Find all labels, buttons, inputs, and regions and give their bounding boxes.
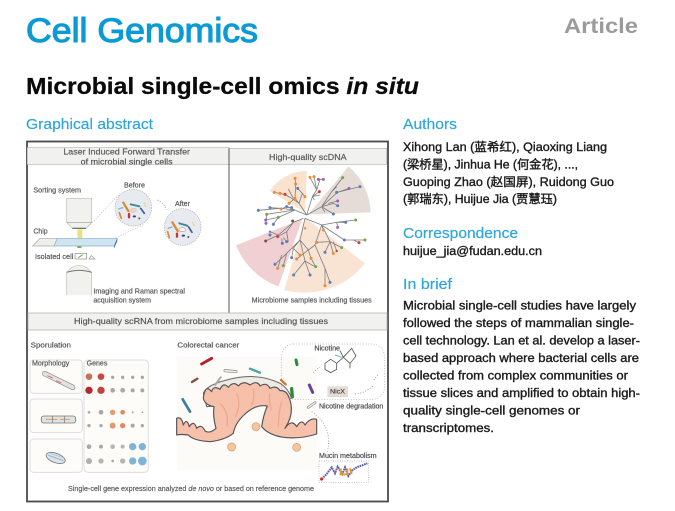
- label: sorting system: Sorting system: [33, 185, 81, 194]
- label: imaging system: acquisition system: [93, 295, 151, 304]
- panel: sporulation: [30, 341, 148, 472]
- illustration: mucus layer: [203, 377, 292, 407]
- text block: authors: Xihong Lan (蓝希红), Qiaoxing Liang: [403, 139, 607, 154]
- icon: red bacterium: [202, 358, 212, 364]
- card: morphology 2: [30, 399, 82, 433]
- chart: blue leaf nodes: [257, 185, 361, 284]
- heading: graphical abstract: Graphical abstract: [26, 117, 153, 133]
- caption: single-cell gene expression: Single-cell gene expression analyzed de novo or based on reference genome: [68, 484, 314, 493]
- text block: authors: (梁桥星), Jinhua He (何金花), ...,: [403, 156, 578, 172]
- card: morphology 1: Morphology: [32, 361, 70, 368]
- icon: lower objective: [67, 265, 92, 295]
- panel: high-quality scDNA: [229, 148, 387, 313]
- arrow: before to after: [157, 200, 167, 210]
- text block: in brief summary: collected from complex communities or: [403, 368, 628, 382]
- icon: cells below tissue: [228, 423, 301, 451]
- icon: bacteria group: [183, 360, 315, 412]
- chart: red leaf nodes: [276, 190, 360, 252]
- label: sporulation: Sporulation: [31, 341, 71, 350]
- card: morphology 3: [30, 439, 82, 472]
- panel: colorectal cancer: [177, 340, 384, 482]
- text block: in brief summary: Microbial single-cell studies have largely: [403, 298, 637, 312]
- chart: green leaf nodes: [265, 176, 366, 268]
- heading: scDNA: High-quality scDNA: [269, 152, 347, 162]
- label: isolated cell: Isolated cell: [35, 252, 74, 261]
- text block: in brief summary: [403, 298, 640, 435]
- text block: authors: [403, 139, 614, 206]
- text block: authors: (郭瑞东), Huijue Jia (贾慧珏): [403, 191, 557, 206]
- illustration: tissue folds: [220, 388, 282, 427]
- callout: nicotine degradation: Nicotine: [314, 346, 340, 353]
- text block: in brief summary: transcriptomes.: [403, 421, 494, 435]
- text block: in brief summary: followed the steps of mammalian single-: [403, 316, 634, 330]
- text block: authors: Guoping Zhao (赵国屏), Ruidong Guo: [403, 175, 614, 189]
- text block: in brief summary: tissue slices and amplified to obtain high-: [403, 386, 640, 400]
- icon: upper objective: [67, 198, 92, 228]
- text block: email: huijue_jia@fudan.edu.cn: [403, 244, 542, 258]
- callout: nicotine degradation: NicX: [330, 389, 346, 396]
- label: after: After: [175, 201, 191, 208]
- icon: after sample circle: [164, 209, 201, 245]
- article type label: Article: [564, 14, 638, 38]
- panel: laser induced forward transfer: [27, 146, 229, 304]
- heading: correspondence: Correspondence: [403, 226, 518, 242]
- band: high-quality scRNA heading: High-quality scRNA from microbiome samples including tissues: [74, 316, 329, 326]
- title: Microbial single-cell omics in situ: [26, 73, 419, 99]
- illustration: colon tissue: [177, 383, 317, 442]
- heading: authors: Authors: [403, 117, 457, 133]
- heading: in brief: In brief: [403, 277, 453, 293]
- chart: purple and brown leaf nodes: [264, 178, 350, 242]
- label: nicotine degradation: Nicotine degradation: [319, 401, 383, 410]
- chart: gene dot matrix: Genes: [87, 361, 108, 368]
- label: imaging system: [93, 286, 185, 304]
- label: colorectal cancer: Colorectal cancer: [177, 340, 240, 349]
- panel: graphical abstract figure: [27, 142, 388, 502]
- heading: laser transfer: [63, 146, 190, 166]
- icon: isolated cell well: [75, 253, 95, 259]
- label: mucin metabolism: Mucin metabolism: [319, 451, 377, 460]
- icon: laser beam: [77, 229, 82, 242]
- caption: microbiome samples: Microbiome samples including tissues: [252, 295, 372, 304]
- band: high-quality scRNA heading: [28, 313, 387, 330]
- chart: phylogenetic tree sectors: [236, 166, 371, 293]
- icon: chip slide: [33, 238, 117, 248]
- journal logo: Cell Genomics: Cell Genomics: [26, 12, 258, 50]
- heading: laser transfer: Laser Induced Forward Transfer: [63, 146, 190, 156]
- icon: before sample circle: [115, 189, 152, 226]
- heading: laser transfer: of microbial single cells: [81, 156, 173, 166]
- label: imaging system: Imaging and Raman spectral: [93, 286, 185, 295]
- icon: mucin protein: [319, 461, 368, 482]
- label: before: Before: [124, 182, 145, 189]
- arrow: to mucin metabolism: [312, 412, 329, 452]
- text block: in brief summary: quality single-cell genomes or: [403, 404, 580, 418]
- chart: tree branches: [258, 177, 365, 286]
- callout: nicotine degradation: [282, 344, 384, 399]
- label: chip: Chip: [33, 226, 48, 235]
- text block: in brief summary: based approach where bacterial cells are: [403, 351, 639, 365]
- chart: orange leaf nodes: [273, 175, 335, 287]
- text block: in brief summary: cell technology. Lan et al. develop a laser-: [403, 334, 640, 348]
